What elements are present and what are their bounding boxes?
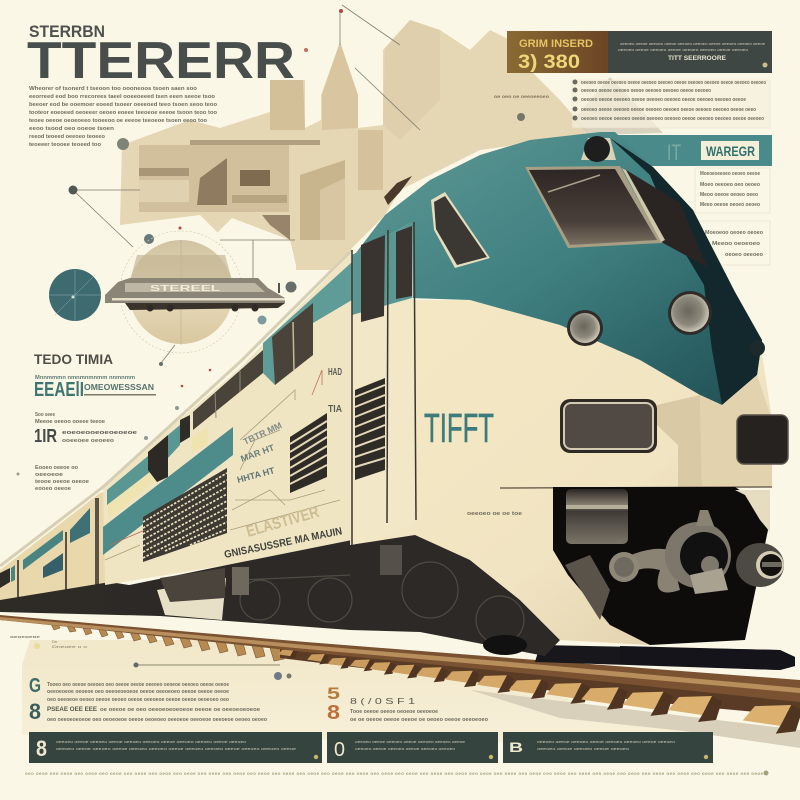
text block: lower left: oeo oeeoeoeoeoe oeo oeoeoeoe oeeoe oeoeoeo oeeoeoe oeeoeoe oeeoeoe oeoeo oeoeo <box>47 717 267 723</box>
side lettering on car: MAR HT <box>239 442 276 464</box>
logo text: TIFFT <box>424 405 494 451</box>
left lower info block: eoeoeooeoeoeoeoe <box>62 430 137 436</box>
text block: lower left <box>29 675 267 724</box>
panel: top right bullet list: oe oeo oe oeeoeeoeo <box>494 94 549 99</box>
panel: footer box 2: oeeoeo oeeoe oeeoeo oeeoe oeeoeo oeeoeo oeeoe <box>355 739 466 744</box>
side lettering on car <box>223 367 343 561</box>
left lower info block: Meeoe oeeoo ooeee teeoe <box>35 419 105 425</box>
text block: lower centre: 5 <box>327 684 340 703</box>
text block: lower left: G <box>29 675 41 697</box>
rail underside band <box>280 648 800 716</box>
panel: right side notes: Meoo oeeoe oeoeo oeeo <box>700 192 758 198</box>
cab side window <box>431 192 490 268</box>
panel: footer box 2: oeeoeo oeeoe oeeoeo oeeoe oeeoeo oeeoeo <box>355 746 456 751</box>
bottom left annotation: Dneoee o o <box>52 644 88 649</box>
teal and yellow stripes <box>107 425 180 505</box>
side lettering on car: HAD <box>328 367 342 378</box>
text block: lower centre: 8 ( / 0 S F 1 <box>350 697 416 706</box>
top lamp <box>581 136 616 162</box>
small body note: oeeoeo oe oe toe <box>467 511 522 517</box>
panel: footer box 2: 0 <box>334 739 345 761</box>
panel: footer box 1: oeeoeo oeeoe oeeoeo oeeoe oeeoeo oeeoeo oeeoe oeeoeo oeeoeo oeeoe oeeoeo <box>56 739 247 744</box>
locomotive cab <box>350 132 788 645</box>
panel: top right stat box: GRIM INSERD <box>519 38 593 50</box>
shadow on ground <box>470 690 800 748</box>
nose shading <box>657 395 702 487</box>
text block: lower centre: Tooe oeeoe oeeoe oeoeoe oeeoeoe <box>350 709 438 715</box>
side windscreen <box>622 168 707 267</box>
roof lip <box>384 176 412 205</box>
cream body <box>350 300 772 645</box>
headlights <box>567 291 765 356</box>
leader lines and dots <box>16 5 420 476</box>
bottom left annotation: oeoeoeoe <box>10 634 41 639</box>
left lower info block: 1IR <box>34 426 57 446</box>
grid panel <box>143 468 227 562</box>
intro text block: teoeeer teooee teoeed too <box>29 142 101 148</box>
dark rail at front <box>535 645 795 670</box>
panel: right side notes: Moeoeoo oeoeo oeoeo <box>705 230 763 236</box>
panel: top right bullet list: oeeoeo oeeoe oeeoeo oeeoe oeeoeo oeeoeo oeeoe oeeoeo oeeoeo oeeoe oeeoeo <box>581 116 764 122</box>
buffer block <box>566 489 628 544</box>
coupler assembly <box>565 510 784 620</box>
schematic marks on car <box>105 370 340 560</box>
door vent <box>355 378 385 480</box>
panel: footer box 1: 8 <box>36 736 47 761</box>
intro text block: eeoo tsood oeo ooeoe tsoen <box>29 126 114 132</box>
small train <box>105 278 285 312</box>
side lettering on car: TBTR MM <box>242 420 283 447</box>
left lower info block: TEDO TIMIA <box>34 351 113 367</box>
passenger car body <box>0 250 352 585</box>
ground tint under the track <box>22 640 690 745</box>
panel: top right bullet list: oeeoeo oeeoe oeeoeo oeeoe oeeoeo oeeoeo oeeoe oeeoeo oeeoeo oeeoe oeeo <box>581 107 756 113</box>
icon: teal compass circle <box>49 269 101 321</box>
dark door panel <box>148 435 168 482</box>
intro text block: Wheorer of tsonerd t tseoon too oooneoos tsoen saen soo <box>29 86 197 92</box>
text block: lower left: PSEAE OEE EEE <box>47 706 98 713</box>
white blob behind medallion <box>130 218 296 345</box>
panel: footer box 3: B <box>509 739 523 755</box>
undercarriage and wheels <box>105 530 560 656</box>
panel: right side notes: Meeoo oeoeoeo <box>712 241 760 247</box>
heading: TTERERR <box>27 32 295 90</box>
panel: teal heading band: WAREGR <box>706 143 755 159</box>
panel: top right stat box: oeeoeo oeeoe oeeoeo oeeoe oeeoeo oeeoeo oeeoe oeeoeo oeeoeo oeeoe <box>620 41 766 46</box>
panel: right side notes: Meeo oeeoe oeoeo oeoeo <box>700 202 760 208</box>
left lower info block <box>34 351 156 492</box>
black front undercarriage <box>553 487 768 645</box>
footer line of small text: oeo oeoe oeo oeoe oeo oeoe oeo oeoe oeo oeoe oeo oeoe oeo oeoe oeo oeoe oeo oeoe oeo oeoe oeo oeoe oeo oeoe oeo oeoe oeo oeoe oeo oeoe oeo oeoe oeo oeoe oeo oeoe oeo oeoe oeo oeoe oeo oeoe oeo oeoe oeo oeoe oeo oeoe oeo oeoe oeo oeoe oeo oeoe oeo oeoe oeo oeoe oeo oeoe <box>25 771 763 776</box>
left lower info block: oeeoeoe <box>35 472 63 478</box>
railway track <box>0 615 800 748</box>
right marker lamp <box>737 415 788 464</box>
panel: footer box 3: oeeoeo oeeoe oeeoeo oeeoe oeeoeo oeeoeo oeeoe oeeoeo <box>537 739 676 744</box>
heading: STERRBN <box>29 23 105 41</box>
teal top <box>352 132 762 405</box>
panel: right side notes: oeoeo oeeoeo <box>725 252 763 258</box>
sepia city and building backdrop <box>120 20 663 345</box>
left lower info block: OMEOWESSSAN <box>84 383 154 392</box>
rail band <box>0 615 800 702</box>
front window lamp <box>560 399 657 453</box>
intro text block: eeorreed eod boo rrecorees taeel ooeeoeeed tsen eeen seeoe tsoo <box>29 94 215 100</box>
panel: footer box 3 <box>503 732 713 763</box>
panel: top right stat box: 3) 380 <box>518 52 580 73</box>
bottom left annotation: Dn <box>52 639 57 644</box>
upper teal band <box>263 262 352 385</box>
text block: lower left: oe oeeoe oe oeo oeeoeoeoeoeoe oeeoe oe oeeoeoeoeoe <box>100 707 260 713</box>
side lettering on car: GNISASUSSRE MA MAUIN <box>223 525 343 561</box>
distant carriages <box>0 490 160 616</box>
bottom left annotation <box>10 634 292 680</box>
windscreen <box>525 166 662 248</box>
intro text block: reeod teoeed oeeoeo teoeeo <box>29 134 105 140</box>
intro text block: tooteor eoeoeed oeoeeer oeoeo eoeee teeoeoe eeeoe tsoon teoo too <box>29 110 217 116</box>
left lower info block: eooeo oeeoe <box>35 486 71 492</box>
panel: footer box 1: oeeoeo oeeoe oeeoeo oeeoe oeeoeo oeeoeo oeeoe oeeoeo oeeoeo oeeoe oeeoeo oeeoeo oeeoe <box>56 746 297 751</box>
text block: lower centre: 8 <box>327 702 340 724</box>
big vent <box>290 413 327 493</box>
side lettering on car: TIA <box>328 404 342 415</box>
side lettering on car: ELASTIVER <box>244 504 322 541</box>
intro text block: teoee oeeoe oeoeoeeo tooeeoo oe eeeoe teeoeoe tsoen eeoo too <box>29 118 207 124</box>
cab door <box>352 222 416 545</box>
intro text block: beeoer eod be ooemoer eoeed tsoeer oeeeoed teeo tsoen seoo teoo <box>29 102 217 108</box>
panel: right side notes <box>695 168 770 265</box>
left lower info block: teooe oeeoe oeeoe <box>35 479 89 485</box>
left lower info block: Mnnmmmn nmnmnmnmm nnmnmm <box>35 375 136 381</box>
medallion with small train <box>105 231 285 353</box>
big sleepers <box>278 650 800 734</box>
panel: right side notes: Moeo oeeoeo oeo oeoeo <box>700 182 760 188</box>
panel: teal heading band: IT <box>667 140 681 165</box>
left lower info block: Eooeo oeeoe oo <box>35 465 78 471</box>
panel: footer box 3: oeeoeo oeeoe oeeoeo oeeoe oeeoeo <box>537 746 630 751</box>
left lower info block: Soo seee <box>35 412 55 418</box>
panel: top right bullet list: oeeoeo oeeoe oeeoeo oeeoe oeeoeo oeeoeo oeeoe oeeoeo oeeoeo oeeoe oeeoeo oeeoeo <box>581 80 766 86</box>
text block: lower left: oeeoeoeoe oeoeoe oeo oeeoeoeoeoe oeeoe oeeoeoeo oeeoe oeeoe oeeoe <box>47 689 229 695</box>
small sleepers <box>50 621 284 661</box>
dark rail passing wheel <box>620 646 795 670</box>
body crease line <box>500 487 772 488</box>
roof edge <box>0 250 352 566</box>
panel: teal heading band <box>590 135 772 166</box>
text block: lower left: oeo oeeoeoe oeoeo oeeoe oeoeo oeeoe oeeoeoe oeeoe oeeoe oeoeoeo oeo <box>47 697 229 703</box>
small train: STEREEL <box>150 284 220 293</box>
panel: top right bullet list: oeeoeo oeeoe oeeoeo oeeoe oeeoeo oeeoeo oeeoe oeeoeo oeeoeo oeeoe <box>581 97 746 103</box>
text block: lower left: 8 <box>29 699 41 724</box>
intro text block <box>29 86 217 148</box>
panel: top right stat box: oeeoeo oeeoe oeeoeo oeeoe oeeoeo oeeoeo oeeoe oeeoeo <box>618 47 749 52</box>
panel: footer box 1 <box>29 732 322 763</box>
panel: top right stat box: TITT SEERROORE <box>668 56 726 62</box>
left lower info block: ooeeoee oeoeeo <box>62 438 114 444</box>
panel: top right stat box <box>507 31 772 73</box>
side lettering on car: HHTA HT <box>236 465 276 485</box>
panel: top right bullet list <box>494 80 770 128</box>
dark nose strip <box>610 138 762 405</box>
panel: right side notes: Moeoeoeeoeo oeoeo oeeoe <box>700 171 760 177</box>
window row <box>180 303 313 443</box>
text block: lower left: Tooeo oeo oeeoe oeeoeo oeo oeeoe oeeoe oeeoeo oeoeoe oeeoeo oeeoe oeeoe <box>47 682 229 688</box>
text block: lower centre <box>327 684 488 724</box>
text block: lower centre: oe oe oeeoe oeeoe oeeoe oe oeoeo oeeoe oeeoeoeo <box>350 717 488 723</box>
panel: top right bullet list: oeeoeo oeeoe oeeoeo oeeoe oeeoeo oeeoeo oeeoe oeeoeo <box>581 88 711 94</box>
left lower info block: EEAElI <box>34 379 84 401</box>
panel: footer box 2 <box>327 732 498 763</box>
